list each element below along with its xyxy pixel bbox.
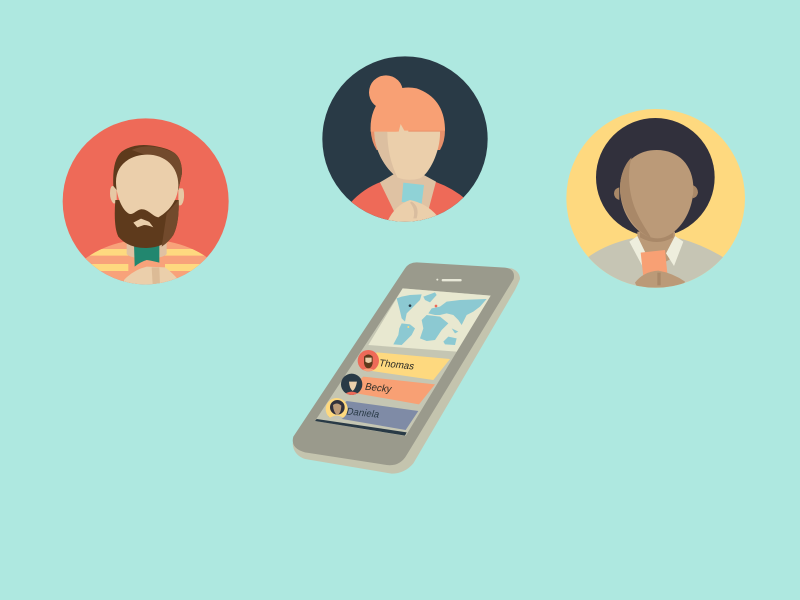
- row: Thomas: [358, 350, 450, 380]
- phone body side: [293, 263, 520, 474]
- avatar: man with afro: [566, 109, 745, 293]
- avatar: bearded man: [63, 118, 229, 290]
- phone face: [293, 262, 514, 465]
- row: Daniela: [326, 398, 418, 430]
- screen: [315, 288, 491, 436]
- row: Thomas: Thomas: [377, 358, 416, 372]
- row: Becky: [341, 374, 435, 404]
- row: Daniela: Daniela: [345, 407, 381, 421]
- avatar: woman with bun: [322, 56, 488, 230]
- bottom bar: [315, 419, 407, 436]
- phone: [293, 262, 520, 474]
- speaker: [436, 279, 462, 281]
- world map: [368, 288, 491, 352]
- row: Becky: Becky: [363, 382, 393, 395]
